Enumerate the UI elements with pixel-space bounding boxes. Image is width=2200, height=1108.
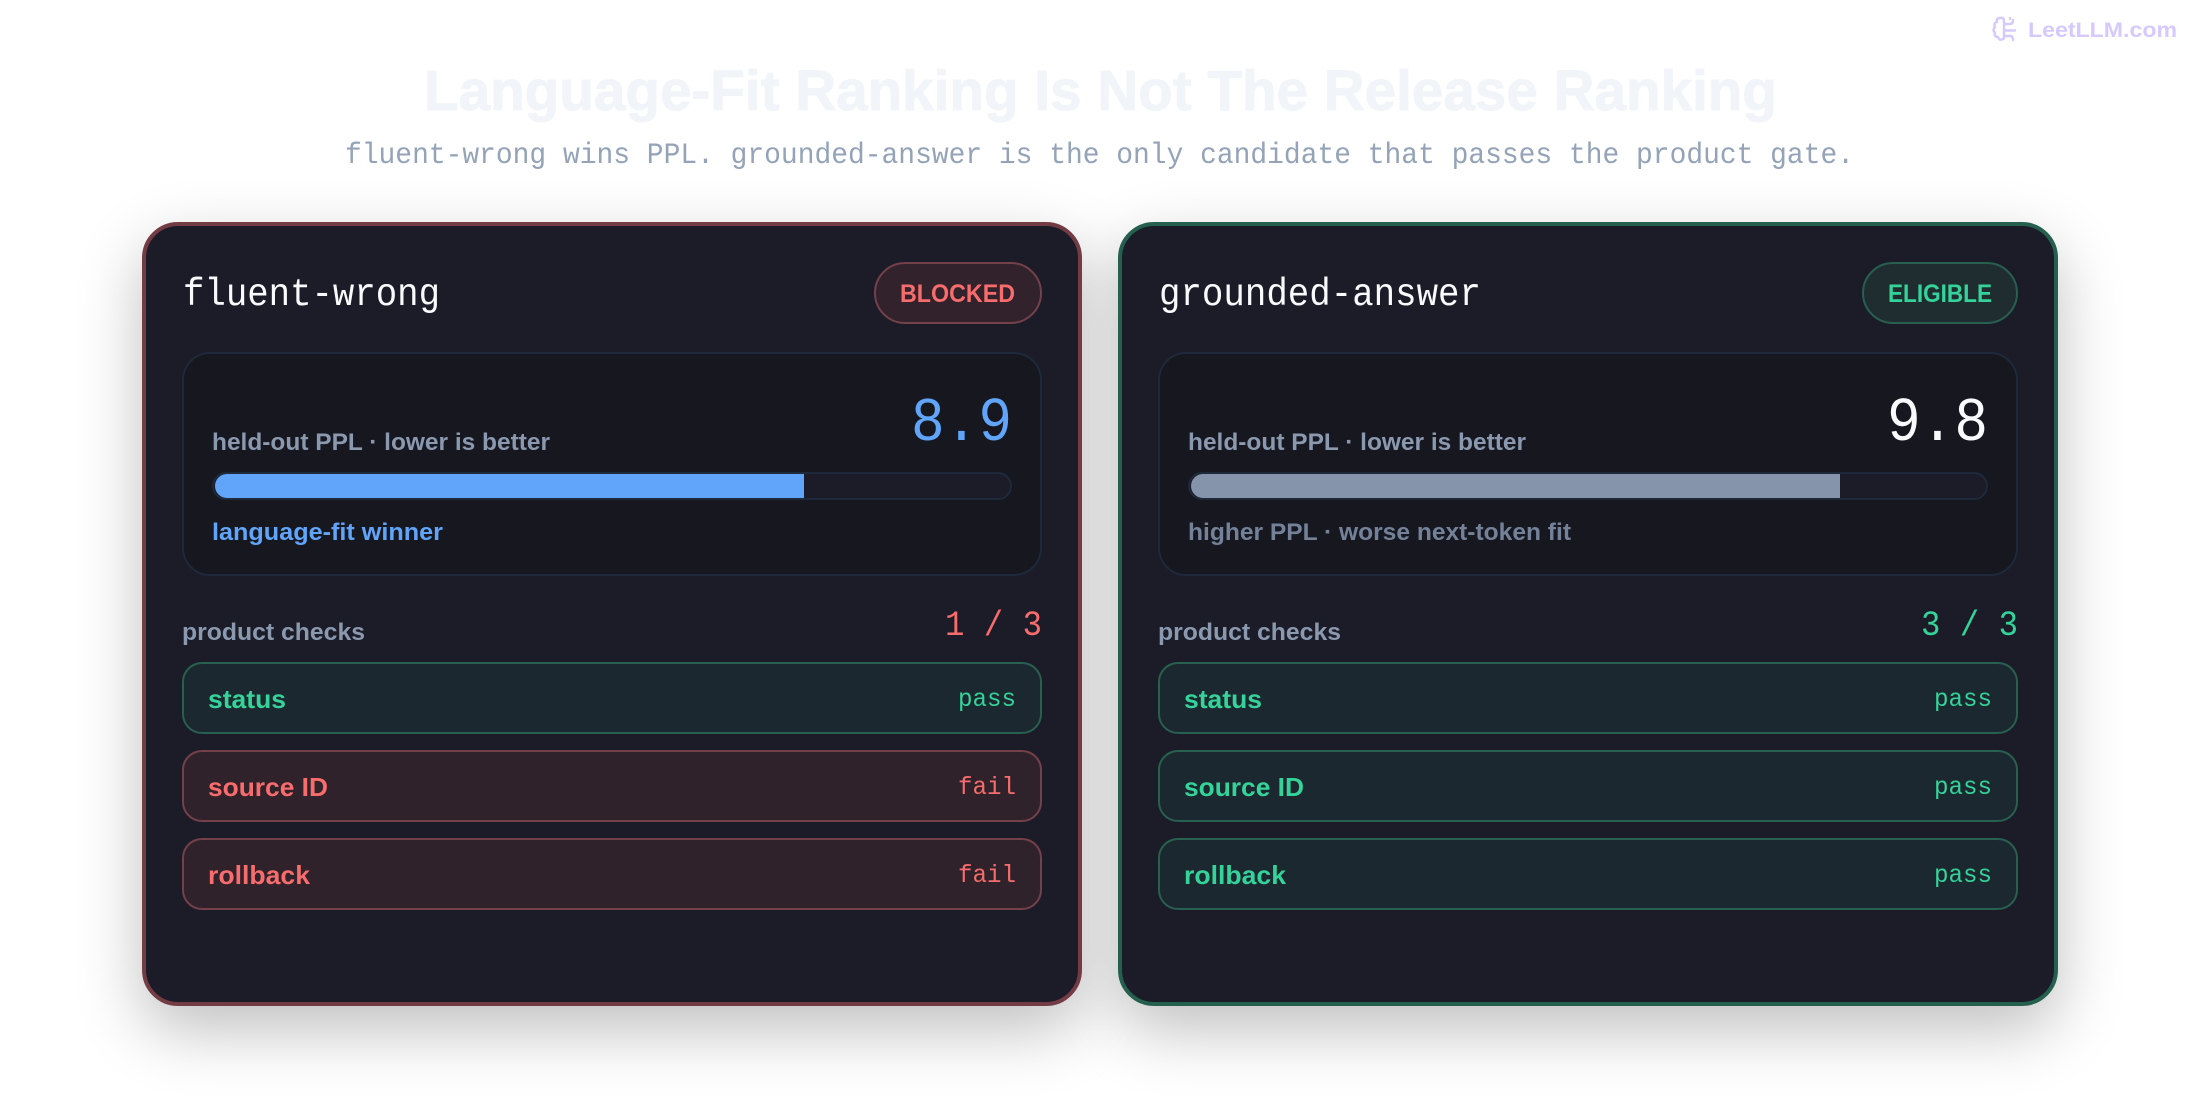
- check row: source ID: source ID: [1184, 772, 1304, 802]
- check row: rollback: [1159, 839, 2017, 909]
- check row: rollback: pass: [1934, 861, 1992, 890]
- icon: brain logo: [1994, 18, 2015, 40]
- check row: status: [1159, 663, 2017, 733]
- check row: source ID: source ID: [208, 772, 328, 802]
- badge: eligible: [1863, 263, 2017, 323]
- check row: rollback: rollback: [208, 860, 311, 890]
- badge: blocked: [875, 263, 1041, 323]
- check row: source ID: [1159, 751, 2017, 821]
- candidate name: fluent-wrong: [183, 273, 440, 317]
- check row: rollback: fail: [958, 861, 1016, 890]
- product checks label: product checks: [182, 619, 365, 646]
- PPL label: held-out PPL · lower is better: [1188, 429, 1526, 456]
- card background: [1120, 224, 2056, 1004]
- check row: source ID: fail: [958, 773, 1016, 802]
- bar caption: higher PPL · worse next-token fit: [1188, 519, 1571, 546]
- watermark: LeetLLM.com: [1994, 18, 2177, 42]
- logo text: LeetLLM.com: [2028, 19, 2177, 42]
- check row: source ID: pass: [1934, 773, 1992, 802]
- check row: status: pass: [958, 685, 1016, 714]
- panel: fluent-wrong card: [144, 224, 1080, 1004]
- bar caption: language-fit winner: [212, 519, 443, 546]
- panel: PPL metric: [1159, 353, 2017, 575]
- bar chart: PPL bar: [1189, 473, 1987, 499]
- bar chart: PPL bar: [213, 473, 1011, 499]
- card background: [144, 224, 1080, 1004]
- badge: eligible: ELIGIBLE: [1888, 280, 1992, 308]
- PPL value: 8.9: [911, 388, 1012, 459]
- product checks score: 3 / 3: [1921, 606, 2018, 646]
- PPL label: held-out PPL · lower is better: [212, 429, 550, 456]
- product checks label: product checks: [1158, 619, 1341, 646]
- PPL value: 9.8: [1887, 388, 1988, 459]
- product checks score: 1 / 3: [945, 606, 1042, 646]
- candidate name: grounded-answer: [1159, 273, 1481, 317]
- check row: rollback: rollback: [1184, 860, 1287, 890]
- check row: status: [183, 663, 1041, 733]
- panel: PPL metric: [183, 353, 1041, 575]
- subtitle: fluent-wrong wins PPL. grounded-answer is the only candidate that passes the product gate.: [345, 139, 1854, 173]
- title: Language-Fit Ranking Is Not The Release Ranking: [424, 59, 1777, 123]
- check row: status: pass: [1934, 685, 1992, 714]
- badge: blocked: BLOCKED: [900, 280, 1015, 308]
- check row: source ID: [183, 751, 1041, 821]
- check row: status: status: [208, 684, 286, 714]
- check row: status: status: [1184, 684, 1262, 714]
- check row: rollback: [183, 839, 1041, 909]
- panel: grounded-answer card: [1120, 224, 2056, 1004]
